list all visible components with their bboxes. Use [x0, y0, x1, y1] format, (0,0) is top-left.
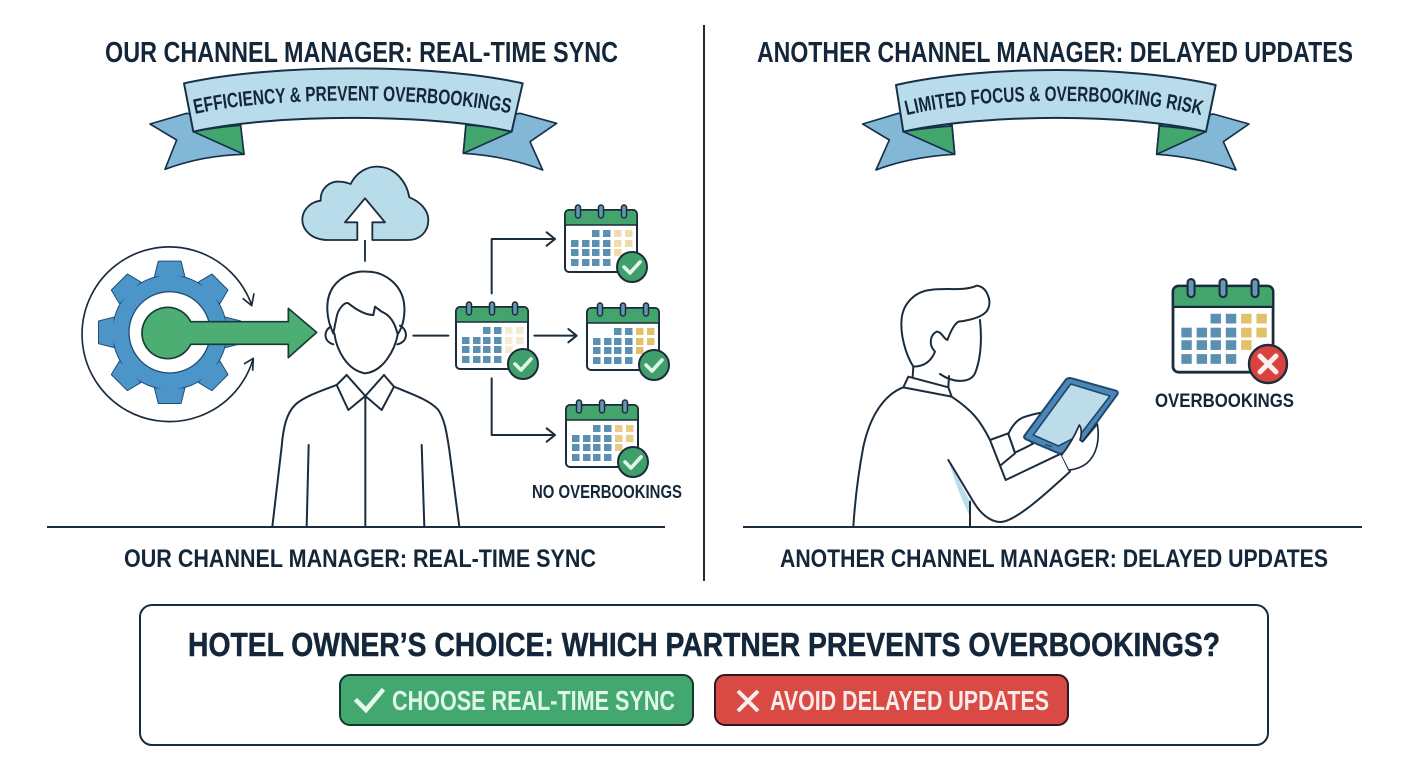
- panel: another channel manager: [743, 37, 1362, 573]
- connector arrows to calendars: [413, 232, 577, 442]
- illustration: person with tablet: [853, 286, 1118, 527]
- ground line left: [47, 526, 665, 528]
- icon: bottom calendar: [566, 400, 648, 477]
- panel: our channel manager: [47, 37, 682, 573]
- icon: top calendar: [565, 205, 647, 282]
- button: avoid delayed updates: AVOID DELAYED UPDATES: [770, 685, 1049, 716]
- heading: our channel manager: OUR CHANNEL MANAGER: REAL-TIME SYNC: [105, 37, 618, 69]
- caption: another channel manager: ANOTHER CHANNEL MANAGER: DELAYED UPDATES: [780, 545, 1328, 573]
- heading: hotel owner's choice: HOTEL OWNER’S CHOICE: WHICH PARTNER PREVENTS OVERBOOKINGS?: [188, 626, 1220, 663]
- icon: gear with rotation arrows: [82, 247, 254, 422]
- icon: source calendar: [456, 302, 538, 379]
- panel divider: [703, 25, 705, 581]
- caption: our channel manager: OUR CHANNEL MANAGER: REAL-TIME SYNC: [124, 545, 596, 573]
- label: no overbookings: NO OVERBOOKINGS: [532, 482, 682, 502]
- ribbon banner: limited focus: LIMITED FOCUS & OVERBOOKING RISK: [904, 86, 1204, 116]
- button: avoid delayed updates: [715, 675, 1068, 725]
- button: choose real-time sync: CHOOSE REAL-TIME SYNC: [392, 685, 675, 716]
- icon: cloud upload: [302, 167, 428, 262]
- label: overbookings: OVERBOOKINGS: [1155, 391, 1294, 412]
- icon: middle calendar: [587, 303, 669, 380]
- panel: hotel owner's choice: [140, 605, 1268, 745]
- ribbon banner: limited focus: [862, 69, 1250, 171]
- icon: overbooked calendar: [1173, 279, 1287, 383]
- illustration: front-facing person: [272, 272, 459, 527]
- button: choose real-time sync: [340, 675, 693, 725]
- ground line right: [743, 526, 1362, 528]
- arrow: gear to person: [142, 307, 317, 359]
- ribbon banner: efficiency: [149, 67, 558, 171]
- ribbon banner: efficiency: EFFICIENCY & PREVENT OVERBOOKINGS: [193, 86, 512, 114]
